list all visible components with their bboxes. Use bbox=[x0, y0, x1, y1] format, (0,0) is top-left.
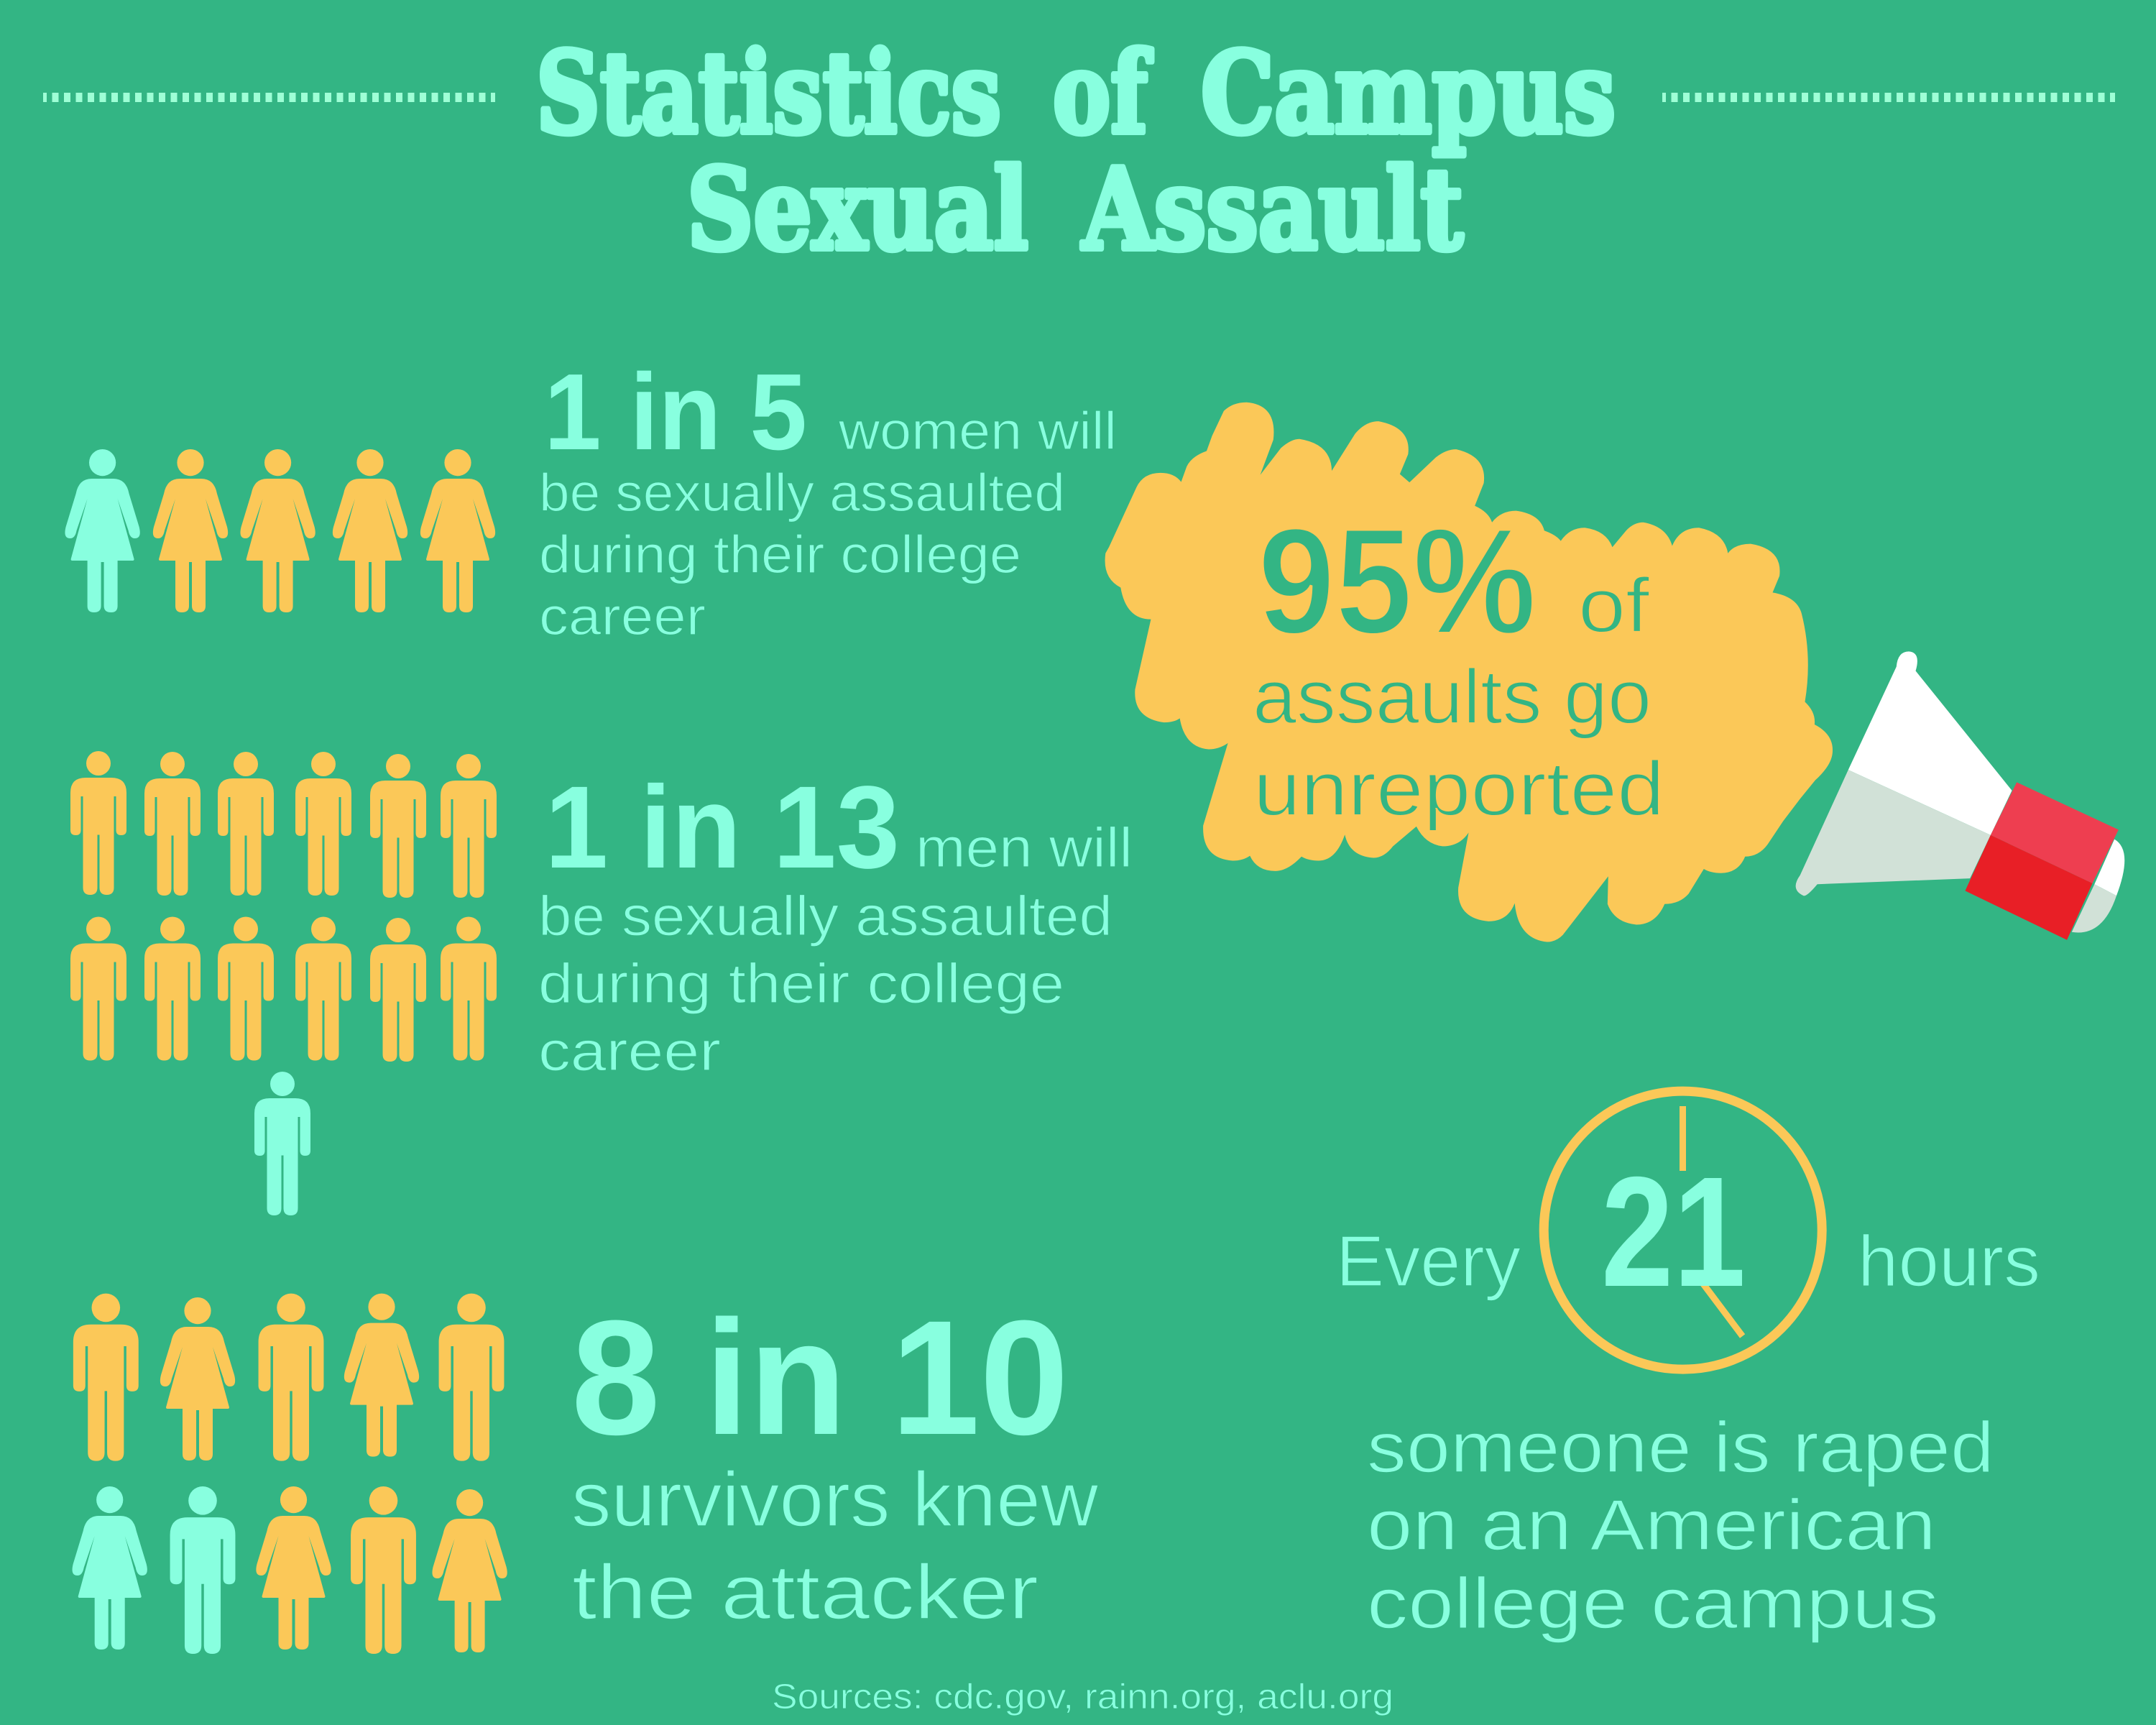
sources: Sources: cdc.gov, rainn.org, aclu.org bbox=[772, 1678, 1393, 1716]
statistic: 1 in 5: 1 in 5 bbox=[544, 351, 807, 472]
text: women will be sexually assaulted bbox=[539, 401, 1117, 646]
icon: clock bbox=[1544, 1091, 1822, 1369]
text: women will be sexually assaulted: be sexually assaulted bbox=[539, 463, 1065, 523]
pictogram: five women, one highlighted bbox=[65, 449, 495, 612]
text: women will be sexually assaulted: women will bbox=[838, 401, 1117, 461]
panel: 1 in 5 women bbox=[65, 351, 1117, 646]
text: of assaults go unreported: of bbox=[1578, 562, 1649, 648]
statistic: 95%: 95% bbox=[1258, 497, 1537, 666]
text: of assaults go unreported: unreported bbox=[1253, 745, 1664, 832]
text: men will be sexually assaulted: career bbox=[538, 1019, 721, 1082]
pictogram: ten people, two highlighted bbox=[73, 1294, 507, 1654]
blob shape bbox=[1105, 402, 1833, 942]
title: Assault bbox=[1081, 144, 1463, 275]
text: men will be sexually assaulted: men will bbox=[916, 816, 1133, 879]
text: men will be sexually assaulted bbox=[538, 816, 1133, 1082]
text: men will be sexually assaulted: be sexually assaulted bbox=[538, 884, 1112, 947]
title bbox=[536, 27, 1616, 275]
dotted divider left bbox=[43, 93, 495, 102]
text: someone is raped on an American college campus: college campus bbox=[1367, 1563, 1939, 1644]
title: Campus bbox=[1201, 27, 1616, 159]
text: someone is raped on an American college campus bbox=[1367, 1407, 1994, 1644]
icon: megaphone bbox=[1796, 651, 2124, 940]
statistic: 21: 21 bbox=[1601, 1145, 1746, 1320]
text: someone is raped on an American college campus: on an American bbox=[1367, 1485, 1936, 1565]
title: Sexual bbox=[687, 144, 1028, 275]
text: women will be sexually assaulted: career bbox=[539, 586, 706, 646]
text: women will be sexually assaulted: during their college bbox=[539, 525, 1021, 584]
text: Every: Every bbox=[1336, 1221, 1521, 1302]
text: of assaults go unreported: assaults go bbox=[1253, 653, 1651, 740]
text: hours: hours bbox=[1858, 1221, 2040, 1302]
pictogram: thirteen men, one highlighted bbox=[70, 751, 497, 1215]
panel: 8 in 10 survivors bbox=[73, 1287, 1099, 1654]
text: survivors knew the attacker: survivors knew bbox=[571, 1455, 1099, 1542]
title: Statistics bbox=[536, 27, 1001, 159]
statistic: 8 in 10: 8 in 10 bbox=[571, 1287, 1069, 1469]
panel: 1 in 13 men bbox=[70, 751, 1133, 1215]
text: survivors knew the attacker bbox=[571, 1455, 1099, 1635]
text: men will be sexually assaulted: during their college bbox=[538, 952, 1064, 1015]
panel: 95% unreported speech blob bbox=[1105, 402, 1833, 942]
text: of assaults go unreported bbox=[1253, 562, 1664, 832]
text: survivors knew the attacker: the attacker bbox=[572, 1548, 1038, 1635]
panel: every 21 hours bbox=[1336, 1091, 2040, 1644]
title: of bbox=[1053, 27, 1153, 159]
statistic: 1 in 13: 1 in 13 bbox=[545, 761, 900, 893]
dotted divider right bbox=[1662, 93, 2115, 102]
text: someone is raped on an American college campus: someone is raped bbox=[1367, 1407, 1994, 1488]
